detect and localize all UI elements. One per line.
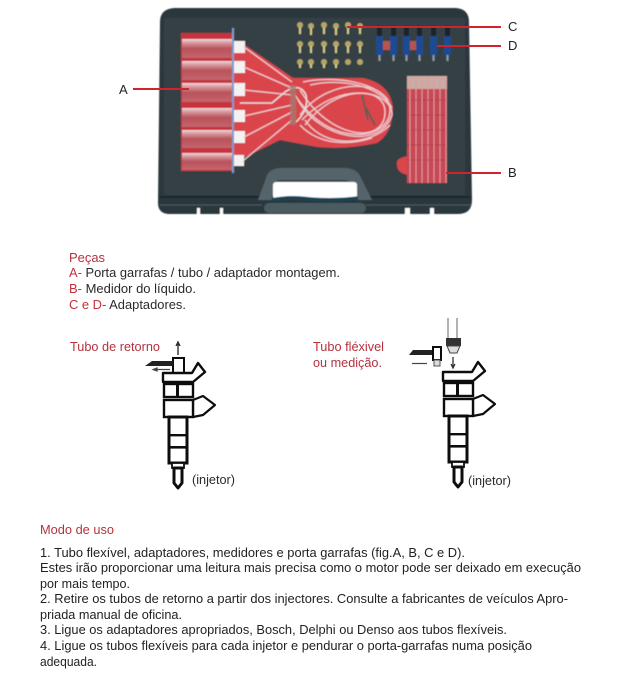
- parts list: [69, 251, 340, 312]
- liquid meter tubes B: [397, 76, 447, 183]
- adapters D: [376, 26, 451, 61]
- diagram: return tube injector: [70, 340, 235, 488]
- bottle caps: [234, 41, 245, 166]
- small tube connectors: [362, 95, 375, 125]
- parts heading: Peças: [69, 251, 105, 265]
- case shell: [158, 8, 472, 214]
- measuring connector and arrows: [409, 318, 461, 368]
- label: return tube: Tubo de retorno: [70, 340, 160, 354]
- step 1: 1. Tubo flexível, adaptadores, medidores e porta garrafas (fig.A, B, C e D).: [40, 546, 465, 560]
- adapters C: [297, 22, 363, 68]
- diagram: flexible measuring tube injector: [313, 318, 511, 488]
- step 4 end: adequada.: [40, 655, 97, 669]
- callout line D: [437, 38, 517, 53]
- bottle holder rail: [232, 28, 234, 173]
- part B: B- Medidor do líquido.: [69, 282, 196, 296]
- step 2: 2. Retire os tubos de retorno a partir dos injectores. Consulte a fabricantes de veículos Apro-: [40, 592, 568, 606]
- label A: A: [119, 82, 128, 97]
- carrying handle: [258, 168, 372, 213]
- callout line A: [119, 82, 189, 97]
- label: injector: (injetor): [192, 473, 235, 487]
- step 4: 4. Ligue os tubos flexíveis para cada injetor e pendurar o porta-garrafas numa posição: [40, 639, 532, 653]
- step 3: 3. Ligue os adaptadores apropriados, Bosch, Delphi ou Denso aos tubos flexíveis.: [40, 623, 507, 637]
- tube clamp: [290, 85, 296, 125]
- label: flexible tube or measuring: ou medição.: [313, 356, 382, 370]
- usage heading: Modo de uso: [40, 523, 114, 537]
- bottles: [182, 39, 232, 170]
- callout line B: [446, 165, 517, 180]
- label D: D: [508, 38, 517, 53]
- label B: B: [508, 165, 517, 180]
- label C: C: [508, 19, 517, 34]
- return connector and arrows: [145, 342, 184, 373]
- part A: A- Porta garrafas / tubo / adaptador montagem.: [69, 266, 340, 280]
- usage instructions: [40, 523, 581, 669]
- step 1 detail: Estes irão proporcionar uma leitura mais precisa como o motor pode ser deixado em execução: [40, 561, 581, 575]
- label: flexible tube or measuring: Tubo fléxivel: [313, 340, 384, 354]
- case hinge notches: [197, 208, 434, 215]
- label: injector: (injetor): [468, 474, 511, 488]
- part C and D: C e D- Adaptadores.: [69, 298, 186, 312]
- red bottle tray recess: [181, 33, 232, 171]
- flexible tubes: [240, 47, 392, 160]
- step 2 end: priada manual de oficina.: [40, 608, 182, 622]
- step 1 detail end: por mais tempo.: [40, 577, 130, 591]
- photo: injector test kit case: [158, 8, 472, 215]
